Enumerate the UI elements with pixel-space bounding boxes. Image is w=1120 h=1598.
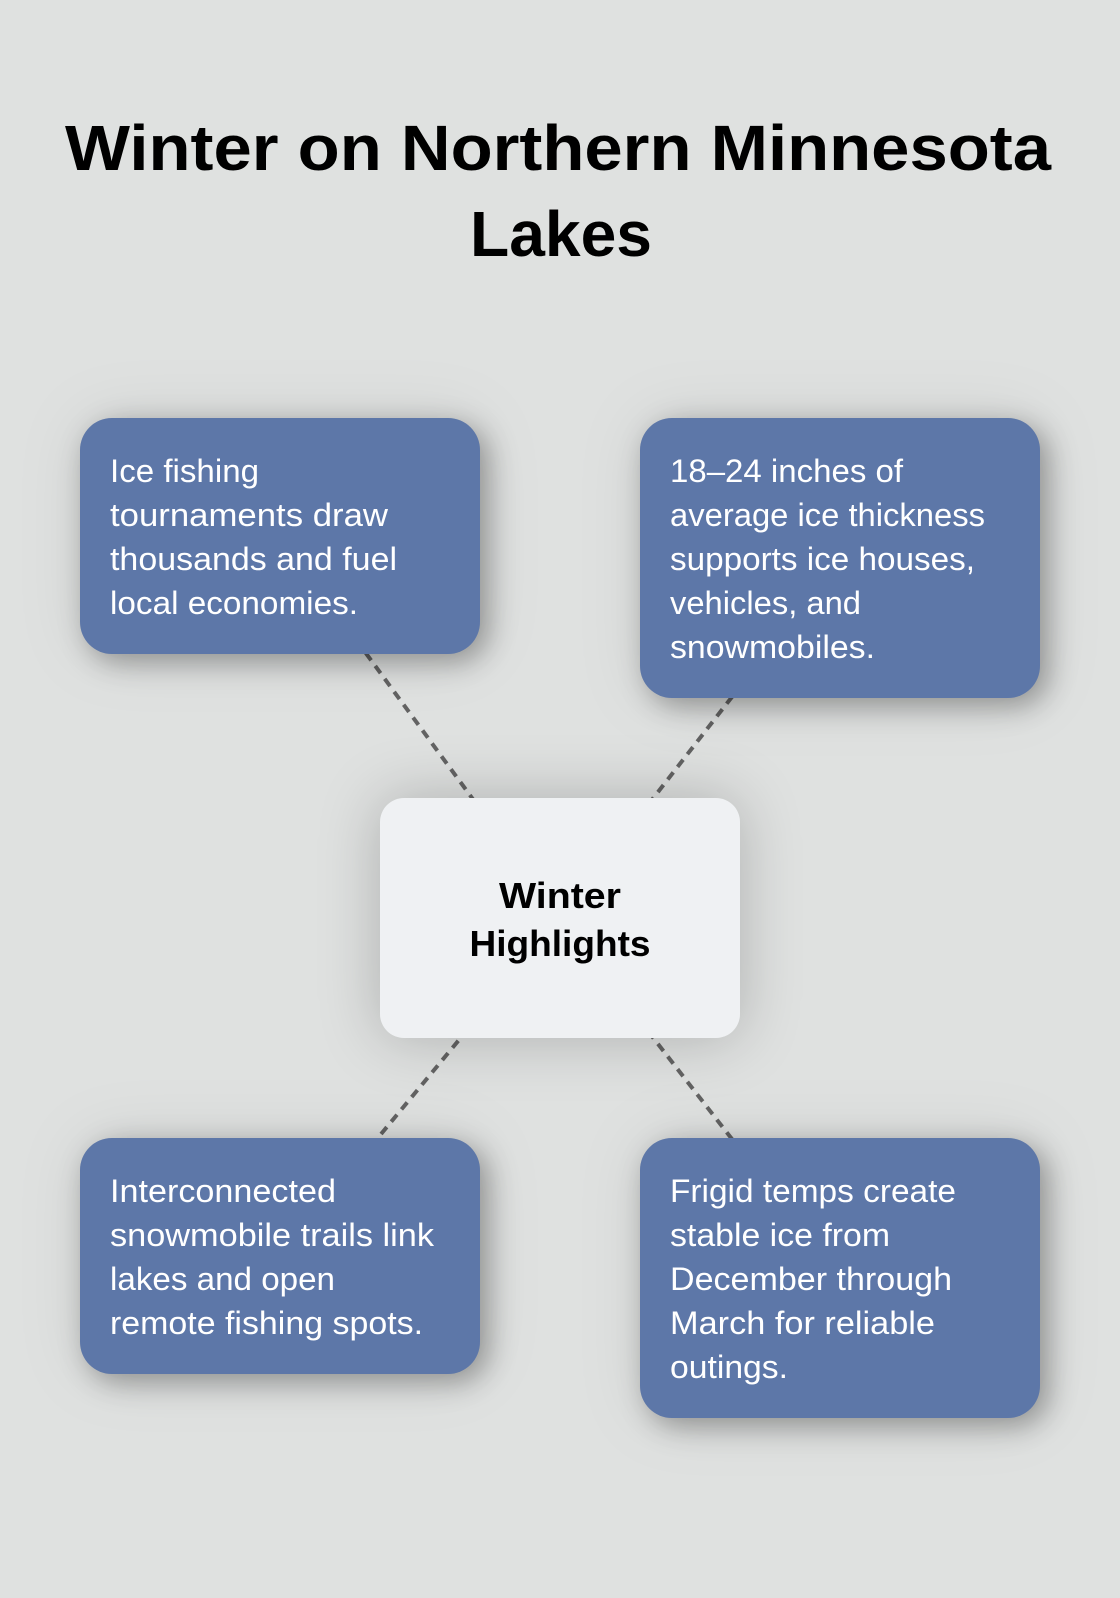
card text: remote fishing spots. xyxy=(110,1305,423,1341)
title: Lakes xyxy=(470,198,652,270)
panel: central hub xyxy=(380,798,740,1038)
card text: 18–24 inches of xyxy=(670,453,903,489)
card text: supports ice houses, xyxy=(670,541,975,577)
dotted connectors from hub to cards xyxy=(280,536,840,1278)
card text: stable ice from xyxy=(670,1217,890,1253)
title: Winter on Northern Minnesota xyxy=(65,112,1051,184)
card text xyxy=(110,453,397,621)
panel: stable ice season xyxy=(640,1138,1040,1418)
card text: December through xyxy=(670,1261,952,1297)
card text: lakes and open xyxy=(110,1261,335,1297)
card text: Interconnected xyxy=(110,1173,336,1209)
card text: Ice fishing xyxy=(110,453,259,489)
hub background xyxy=(380,798,740,1038)
card background xyxy=(640,418,1040,698)
card text: tournaments draw xyxy=(110,497,389,533)
card background xyxy=(80,1138,480,1374)
card text: March for reliable xyxy=(670,1305,935,1341)
card text: average ice thickness xyxy=(670,497,985,533)
panel: snowmobile trails xyxy=(80,1138,480,1374)
card text: snowmobile trails link xyxy=(110,1217,435,1253)
card background xyxy=(640,1138,1040,1418)
card text xyxy=(670,453,985,665)
panel: ice thickness xyxy=(640,418,1040,698)
card text: outings. xyxy=(670,1349,788,1385)
hub label xyxy=(470,875,650,964)
card text: local economies. xyxy=(110,585,358,621)
card background xyxy=(80,418,480,654)
title xyxy=(65,112,1051,270)
panel: ice fishing tournaments xyxy=(80,418,480,654)
card text: thousands and fuel xyxy=(110,541,397,577)
hub label: Highlights xyxy=(470,923,650,964)
card text xyxy=(670,1173,956,1385)
hub label: Winter xyxy=(499,875,621,916)
card text xyxy=(110,1173,435,1341)
card text: vehicles, and xyxy=(670,585,861,621)
card text: snowmobiles. xyxy=(670,629,875,665)
card text: Frigid temps create xyxy=(670,1173,956,1209)
